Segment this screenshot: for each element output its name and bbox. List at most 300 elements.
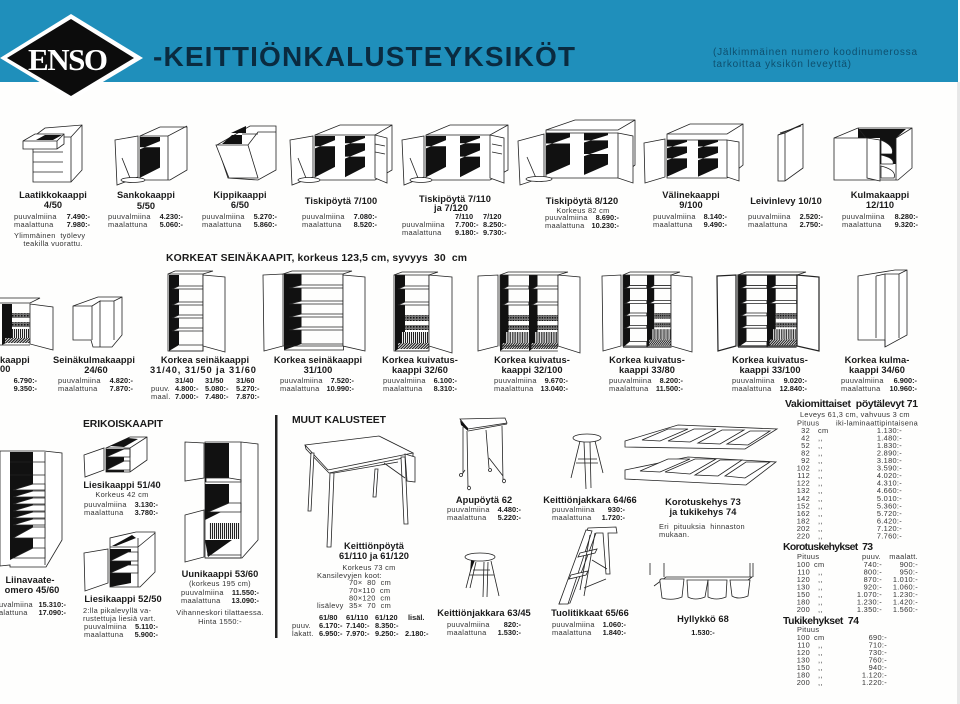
- text: Uunikaappi 53/60: [182, 569, 258, 579]
- panel: Sankokaappi 5/50: [108, 126, 187, 229]
- panel: price table Korotuskehykset 73: puuv.: [862, 552, 881, 561]
- panel: price table Vakiomittaiset pöytälevyt 71: cm: [818, 426, 828, 435]
- text: Liesikaappi 52/50: [84, 594, 162, 604]
- icon: tall wall cabinet: [168, 271, 225, 352]
- panel: price table Korotuskehykset 73: 1.060:-: [893, 582, 918, 592]
- icon: stool: [571, 434, 603, 489]
- text: [83, 480, 161, 517]
- panel: price table Korotuskehykset 73: 1.070:-: [857, 590, 882, 599]
- panel: price table Vakiomittaiset pöytälevyt 71: 102: [797, 464, 810, 472]
- text: mukaan.: [659, 530, 689, 539]
- icon: double drying cabinet: [478, 272, 580, 353]
- text: [609, 355, 685, 393]
- panel: price table Korotuskehykset 73: 200: [797, 605, 810, 614]
- panel: price table Vakiomittaiset pöytälevyt 71: 4.020:-: [877, 471, 902, 480]
- text: maalattuna: [202, 220, 242, 229]
- text: 10.990:-: [326, 384, 355, 393]
- icon: baking board: [778, 124, 803, 181]
- text: puuvalmiina: [108, 212, 151, 221]
- panel: Korkea kuivatuskaappi 33/100: [717, 272, 819, 393]
- panel: price table Korotuskehykset 73: 1.350:-: [857, 605, 882, 614]
- panel: price table Tukikehykset 74: 710:-: [869, 640, 887, 650]
- panel: price table Vakiomittaiset pöytälevyt 71: 1.830:-: [877, 441, 902, 450]
- text: lisälevy: [317, 601, 344, 610]
- text: 31/50: [205, 376, 224, 385]
- text: 1.840:-: [603, 628, 627, 637]
- text: [176, 569, 264, 626]
- panel: price table Vakiomittaiset pöytälevyt 71: ,,: [818, 494, 823, 503]
- panel: price table Korotuskehykset 73: ,,: [818, 605, 823, 614]
- panel: price table Tukikehykset 74: 130: [797, 656, 810, 664]
- panel: price table Vakiomittaiset pöytälevyt 71: ,,: [818, 471, 823, 480]
- text: 8.310:-: [434, 384, 458, 393]
- text: Korkea kuivatus-: [382, 355, 458, 365]
- text: 31/100: [304, 365, 332, 375]
- text: 5.080:-: [205, 384, 229, 393]
- text: 9.490:-: [704, 220, 728, 229]
- panel: Korotuskehys 73 ja tukikehys 74: [625, 425, 777, 539]
- panel: price table Korotuskehykset 73: 180: [797, 598, 810, 606]
- text: maalattuna: [653, 220, 693, 229]
- text: maalattuna: [84, 630, 124, 639]
- text: Korkeus 82 cm: [556, 206, 610, 215]
- text: puuvalmiina: [552, 505, 595, 514]
- panel: price table Tukikehykset 74: ,,: [818, 640, 823, 650]
- text: [543, 495, 637, 522]
- panel: Tiskipöytä 7/110 ja 7/120: [402, 125, 508, 237]
- text: 00: [0, 364, 10, 374]
- text: 7/120: [483, 212, 502, 221]
- panel: price table Korotuskehykset 73: ,,: [818, 598, 823, 606]
- icon: kitchen table: [305, 436, 415, 547]
- logo: ENSO diamond: [0, 14, 143, 101]
- panel: price table Tukikehykset 74: ,,: [818, 656, 823, 664]
- text: [292, 541, 429, 638]
- text: Korkea kuivatus-: [732, 355, 808, 365]
- text: Tiskipöytä 7/100: [305, 196, 377, 206]
- panel: price table Vakiomittaiset pöytälevyt 71: 32: [801, 426, 810, 435]
- text: puuvalmiina: [842, 212, 885, 221]
- text: 7.490:-: [67, 212, 91, 221]
- text: 15.310:-: [38, 600, 67, 609]
- panel: price table Vakiomittaiset pöytälevyt 71: 4.310:-: [877, 478, 902, 488]
- text: 61/110 ja 61/120: [339, 551, 409, 561]
- text: maalattuna: [302, 220, 342, 229]
- panel: price table Tukikehykset 74: Pituus: [797, 625, 819, 634]
- panel: price table Tukikehykset 74: 120: [797, 648, 810, 657]
- panel: price table Vakiomittaiset pöytälevyt 71: 42: [801, 434, 810, 442]
- text: 9.020:-: [784, 376, 808, 385]
- text: 7.980:-: [67, 220, 91, 229]
- text: (korkeus 195 cm): [189, 579, 251, 588]
- text: 4.800:-: [175, 384, 199, 393]
- text: [494, 355, 570, 393]
- panel: price table Tukikehykset 74: ,,: [818, 648, 823, 657]
- text: puuvalmiina: [181, 588, 224, 597]
- panel: price table Vakiomittaiset pöytälevyt 71: ,,: [818, 532, 823, 540]
- panel: price table Vakiomittaiset pöytälevyt 71: 2.890:-: [877, 448, 902, 458]
- text: maalattuna: [14, 220, 54, 229]
- panel: price table Tukikehykset 74: Tukikehykset 74: [783, 616, 859, 627]
- panel: price table Tukikehykset 74: 200: [797, 678, 810, 687]
- panel: price table Vakiomittaiset pöytälevyt 71: ,,: [818, 478, 823, 488]
- panel: price table Korotuskehykset 73: 920:-: [864, 582, 882, 592]
- text: 6.100:-: [434, 376, 458, 385]
- panel: price table Korotuskehykset 73: 870:-: [864, 575, 882, 584]
- text: puuvalmiina: [653, 212, 696, 221]
- panel: price table Korotuskehykset 73: Pituus: [797, 552, 819, 561]
- header note: [713, 47, 917, 70]
- panel: Tiskipöytä 7/100: [290, 125, 392, 229]
- text: 2.750:-: [800, 220, 824, 229]
- text: 9/100: [679, 200, 703, 210]
- text: 12/110: [866, 200, 894, 210]
- text: 9.180:-: [455, 228, 479, 237]
- text: maalattuna: [609, 384, 649, 393]
- panel: price table Vakiomittaiset pöytälevyt 71: ,,: [818, 516, 823, 526]
- text: 7.140:-: [346, 621, 370, 630]
- panel: price table Vakiomittaiset pöytälevyt 71: 92: [801, 456, 810, 465]
- text: [53, 355, 135, 393]
- text: maalattuna: [732, 384, 772, 393]
- text: 70× 80 cm: [349, 578, 391, 587]
- panel: Korkea seinäkaappi 31/40, 31/50, 31/60: [150, 271, 260, 401]
- panel: Uunikaappi 53/60: [176, 442, 264, 626]
- panel: Liinavaatekomero 45/60: [0, 451, 67, 617]
- panel: price table Tukikehykset 74: 180: [797, 670, 810, 680]
- icon: sink cabinet: [290, 125, 392, 185]
- text: puuvalmiina: [302, 212, 345, 221]
- text: 5.220:-: [498, 513, 522, 522]
- panel: cropped cabinet left edge: [0, 298, 53, 393]
- header banner: [0, 0, 958, 101]
- panel: price table Korotuskehykset 73: 800:-: [864, 568, 882, 576]
- text: Kippikaappi: [213, 190, 267, 200]
- panel: price table Vakiomittaiset pöytälevyt 71: ,,: [818, 448, 823, 458]
- panel: price table Vakiomittaiset pöytälevyt 71: 152: [797, 502, 810, 510]
- text: lakatt.: [292, 629, 314, 638]
- text: Laatikkokaappi: [19, 190, 87, 200]
- text: [108, 190, 184, 229]
- text: [551, 608, 629, 637]
- panel: Laatikkokaappi 4/50: [14, 125, 91, 248]
- text: [202, 190, 278, 229]
- text: Korkea seinäkaappi: [274, 355, 362, 365]
- panel: price table Tukikehykset 74: 1.220:-: [862, 678, 887, 687]
- panel: price table Korotuskehykset 73: [783, 542, 918, 614]
- text: Liinavaate-: [5, 575, 55, 585]
- text: 3.780:-: [135, 508, 159, 517]
- text: Hinta 1550:-: [198, 617, 242, 626]
- text: 1.530:-: [691, 628, 715, 637]
- text: ja tukikehys 74: [669, 507, 737, 517]
- text: 31/40, 31/50 ja 31/60: [150, 365, 256, 375]
- text: 10.960:-: [889, 384, 918, 393]
- icon: drying cabinet: [394, 272, 452, 353]
- icon: bucket cabinet: [115, 126, 187, 185]
- text: puuvalmiina: [402, 220, 445, 229]
- text: [732, 355, 808, 393]
- icon: stove-side cabinet: [84, 437, 147, 477]
- header note: tarkoittaa yksikön leveyttä): [713, 59, 851, 70]
- panel: price table Korotuskehykset 73: 740:-: [864, 560, 882, 569]
- panel: Tuolitikkaat 65/66: [551, 527, 629, 637]
- panel: price table Korotuskehykset 73: 1.230:-: [893, 590, 918, 599]
- text: Keittiönjakkara 63/45: [437, 608, 531, 618]
- icon: utensil cabinet: [644, 124, 743, 183]
- text: Korkeus 73 cm: [342, 563, 396, 572]
- panel: Keittiönpöytä 61/110 ja 61/120: [292, 436, 429, 638]
- text: maalattuna: [108, 220, 148, 229]
- text: 8.140:-: [704, 212, 728, 221]
- text: puuv.: [151, 384, 170, 393]
- text: 3.130:-: [135, 500, 159, 509]
- text: 1.720:-: [602, 513, 626, 522]
- text: 5.270:-: [236, 384, 260, 393]
- title: -KEITTIÖNKALUSTEYKSIKÖT: [153, 41, 575, 72]
- panel: price table Vakiomittaiset pöytälevyt 71: 7.760:-: [877, 532, 902, 540]
- panel: price table Tukikehykset 74: 940:-: [869, 663, 887, 672]
- heading: ERIKOISKAAPIT: ERIKOISKAAPIT: [83, 419, 164, 430]
- panel: price table Tukikehykset 74: ,,: [818, 678, 823, 687]
- text: [83, 594, 162, 639]
- text: 930:-: [608, 505, 626, 514]
- text: puuvalmiina: [280, 376, 323, 385]
- panel: price table Vakiomittaiset pöytälevyt 71: 142: [797, 494, 810, 503]
- text: Keittiönjakkara 64/66: [543, 495, 637, 505]
- panel: price table Tukikehykset 74: 100: [797, 633, 810, 642]
- panel: price table Tukikehykset 74: ,,: [818, 670, 823, 680]
- icon: frames: [625, 425, 777, 485]
- text: maalattuna: [494, 384, 534, 393]
- panel: price table Korotuskehykset 73: ,,: [818, 568, 823, 576]
- text: Vihanneskori tilattaessa.: [176, 608, 264, 617]
- text: 5.270:-: [254, 212, 278, 221]
- text: 7.080:-: [354, 212, 378, 221]
- panel: price table Vakiomittaiset pöytälevyt 71: 122: [797, 478, 810, 488]
- panel: price table Vakiomittaiset pöytälevyt 71: ,,: [818, 524, 823, 533]
- text: maalattuna: [748, 220, 788, 229]
- text: puuv.: [292, 621, 311, 630]
- text: 4.230:-: [160, 212, 184, 221]
- text: Liesikaappi 51/40: [83, 480, 161, 490]
- text: 7.000:-: [175, 392, 199, 401]
- text: 5.860:-: [254, 220, 278, 229]
- text: 7.970:-: [346, 629, 370, 638]
- text: [0, 575, 67, 617]
- text: Tiskipöytä 7/110: [419, 194, 491, 204]
- heading: MUUT KALUSTEET: MUUT KALUSTEET: [292, 415, 387, 426]
- panel: price table Vakiomittaiset pöytälevyt 71: Vakiomittaiset pöytälevyt 71: [785, 399, 918, 410]
- panel: price table Vakiomittaiset pöytälevyt 71: 5.360:-: [877, 502, 902, 510]
- text: 8.280:-: [895, 212, 919, 221]
- text: 7.520:-: [331, 376, 355, 385]
- text: 35× 70 cm: [349, 601, 391, 610]
- text: maalattuna: [181, 596, 221, 605]
- panel: price table Vakiomittaiset pöytälevyt 71: ,,: [818, 502, 823, 510]
- panel: Apupöytä 62: [447, 418, 522, 522]
- text: uvalmiina: [0, 600, 34, 609]
- icon: drawer cabinet: [23, 125, 82, 182]
- text: maalattuna: [447, 628, 487, 637]
- text: Hyllykkö 68: [677, 614, 729, 624]
- icon: shelf with bins: [650, 563, 753, 599]
- panel: price table Korotuskehykset 73: 120: [797, 575, 810, 584]
- text: 5.060:-: [160, 220, 184, 229]
- text: Leivinlevy 10/10: [750, 196, 822, 206]
- icon: sink cabinet: [518, 120, 635, 185]
- text: Korkeus 42 cm: [95, 490, 149, 499]
- icon: tall corner cabinet: [858, 270, 907, 347]
- icon: wall corner cabinet: [73, 297, 122, 347]
- text: maalattuna: [447, 513, 487, 522]
- panel: price table Vakiomittaiset pöytälevyt 71: ,,: [818, 486, 823, 495]
- text: 5.110:-: [135, 622, 159, 631]
- panel: price table Vakiomittaiset pöytälevyt 71: ,,: [818, 464, 823, 472]
- text: 13.090:-: [231, 596, 260, 605]
- text: Eri pituuksia hinnaston: [659, 522, 745, 531]
- panel: Kippikaappi 6/50: [202, 126, 278, 229]
- icon: low stool: [465, 553, 499, 597]
- text: 2:lla pikalevyllä va-: [83, 606, 152, 615]
- panel: price table Vakiomittaiset pöytälevyt 71: 162: [797, 509, 810, 518]
- text: kaappi 32/60: [392, 365, 448, 375]
- panel: price table Korotuskehykset 73: 130: [797, 582, 810, 592]
- text: puuvalmiina: [84, 622, 127, 631]
- text: [150, 355, 260, 401]
- panel: price table Korotuskehykset 73: 900:-: [900, 560, 918, 569]
- text: Kansilevyjen koot:: [317, 571, 382, 580]
- panel: price table Vakiomittaiset pöytälevyt 71: 3.180:-: [877, 456, 902, 465]
- panel: price table Vakiomittaiset pöytälevyt 71: Leveys 61,3 cm, vahvuus 3 cm: [800, 410, 910, 419]
- text: puuvalmiina: [545, 213, 588, 222]
- text: 13.040:-: [540, 384, 569, 393]
- text: maalattuna: [545, 221, 585, 230]
- panel: price table Korotuskehykset 73: ,,: [818, 590, 823, 599]
- text: Välinekaappi: [662, 190, 720, 200]
- text: 9.730:-: [483, 228, 507, 237]
- text: maalattuna: [383, 384, 423, 393]
- panel: price table Tukikehykset 74: 1.120:-: [862, 670, 887, 680]
- text: 6.790:-: [14, 376, 38, 385]
- text: 5.900:-: [135, 630, 159, 639]
- text: puuvalmiina: [383, 376, 426, 385]
- text: 4/50: [44, 200, 62, 210]
- text: 6.950:-: [319, 629, 343, 638]
- text: Keittiönpöytä: [344, 541, 405, 551]
- panel: price table Tukikehykset 74: cm: [814, 633, 824, 642]
- text: 6/50: [231, 200, 249, 210]
- text: 1.530:-: [498, 628, 522, 637]
- panel: price table Korotuskehykset 73: Korotuskehykset 73: [783, 542, 873, 553]
- panel: price table Tukikehykset 74: 730:-: [869, 648, 887, 657]
- icon: corner cabinet: [834, 128, 912, 181]
- text: 61/110: [346, 613, 368, 622]
- text: Ylimmäinen työlevy: [14, 231, 85, 240]
- panel: Leivinlevy 10/10: [748, 124, 824, 229]
- panel: price table Korotuskehykset 73: 1.010:-: [893, 575, 918, 584]
- text: rustettuja liesiä vart.: [83, 614, 156, 623]
- text: lisäl.: [408, 613, 424, 622]
- text: 6.170:-: [319, 621, 343, 630]
- panel: price table Korotuskehykset 73: 1.230:-: [857, 598, 882, 606]
- text: kaappi 33/80: [619, 365, 675, 375]
- text: 24/60: [84, 365, 108, 375]
- text: Korkea kuivatus-: [609, 355, 685, 365]
- text: [748, 196, 824, 229]
- text: maalattuna: [552, 513, 592, 522]
- panel: price table Korotuskehykset 73: 150: [797, 590, 810, 599]
- text: maalattuna: [842, 220, 882, 229]
- panel: price table Korotuskehykset 73: 100: [797, 560, 810, 569]
- text: puuvalmiina: [609, 376, 652, 385]
- text: 1.060:-: [603, 620, 627, 629]
- text: Korotuskehys 73: [665, 497, 741, 507]
- panel: Seinäkulmakaappi 24/60: [53, 297, 135, 393]
- panel: Keittiönjakkara 63/45: [437, 553, 531, 637]
- section heading: tall wall cabinets: KORKEAT SEINÄKAAPIT, korkeus 123,5 cm, syvyys 30 cm: [166, 251, 467, 264]
- text: kaappi: [0, 355, 30, 365]
- text: [274, 355, 362, 393]
- panel: price table Korotuskehykset 73: ,,: [818, 575, 823, 584]
- text: 70×110 cm: [349, 586, 390, 595]
- panel: price table Vakiomittaiset pöytälevyt 71: 112: [797, 471, 810, 480]
- panel: Hyllykkö 68: [650, 563, 753, 637]
- text: Apupöytä 62: [456, 495, 512, 505]
- panel: price table Vakiomittaiset pöytälevyt 71: 5.720:-: [877, 509, 902, 518]
- text: maalattuna: [280, 384, 320, 393]
- text: 4.480:-: [498, 505, 522, 514]
- text: 61/120: [375, 613, 398, 622]
- header note: (Jälkimmäinen numero koodinumerossa: [713, 47, 917, 58]
- text: 17.090:-: [38, 608, 67, 617]
- text: kaappi 32/100: [501, 365, 563, 375]
- text: puuvalmiina: [748, 212, 791, 221]
- panel: price table Vakiomittaiset pöytälevyt 71: 1.480:-: [877, 434, 902, 442]
- panel: Korkea kuivatuskaappi 32/60: [382, 272, 458, 393]
- icon: wide wall cabinet: [263, 271, 365, 351]
- text: 7/110: [455, 212, 473, 221]
- text: [659, 497, 745, 539]
- text: [402, 194, 507, 237]
- text: [841, 355, 918, 393]
- text: 4.820:-: [110, 376, 134, 385]
- panel: price table Tukikehykset 74: [783, 616, 887, 687]
- panel: price table Vakiomittaiset pöytälevyt 71: 5.010:-: [877, 494, 902, 503]
- panel: Keittiönjakkara 64/66: [543, 434, 637, 522]
- panel: Liesikaappi 51/40: [83, 437, 161, 517]
- text: 11.500:-: [656, 384, 684, 393]
- text: 10.230:-: [591, 221, 620, 230]
- text: Kulmakaappi: [851, 190, 909, 200]
- panel: price table Tukikehykset 74: ,,: [818, 663, 823, 672]
- text: 7.480:-: [205, 392, 229, 401]
- text: [545, 196, 620, 230]
- panel: price table Vakiomittaiset pöytälevyt 71: 132: [797, 486, 810, 495]
- text: kaappi 33/100: [739, 365, 801, 375]
- panel: price table Korotuskehykset 73: cm: [814, 560, 824, 569]
- panel: price table Vakiomittaiset pöytälevyt 71: 6.420:-: [877, 516, 902, 526]
- text: 8.690:-: [596, 213, 620, 222]
- text: kaappi 34/60: [849, 365, 905, 375]
- panel: price table Korotuskehykset 73: 110: [797, 568, 810, 576]
- text: 8.350:-: [375, 621, 399, 630]
- text: puuvalmiina: [732, 376, 775, 385]
- text: ja 7/120: [433, 203, 468, 213]
- panel: price table Tukikehykset 74: 760:-: [869, 656, 887, 664]
- text: Sankokaappi: [117, 190, 175, 200]
- panel: Kulmakaappi 12/110: [834, 128, 919, 229]
